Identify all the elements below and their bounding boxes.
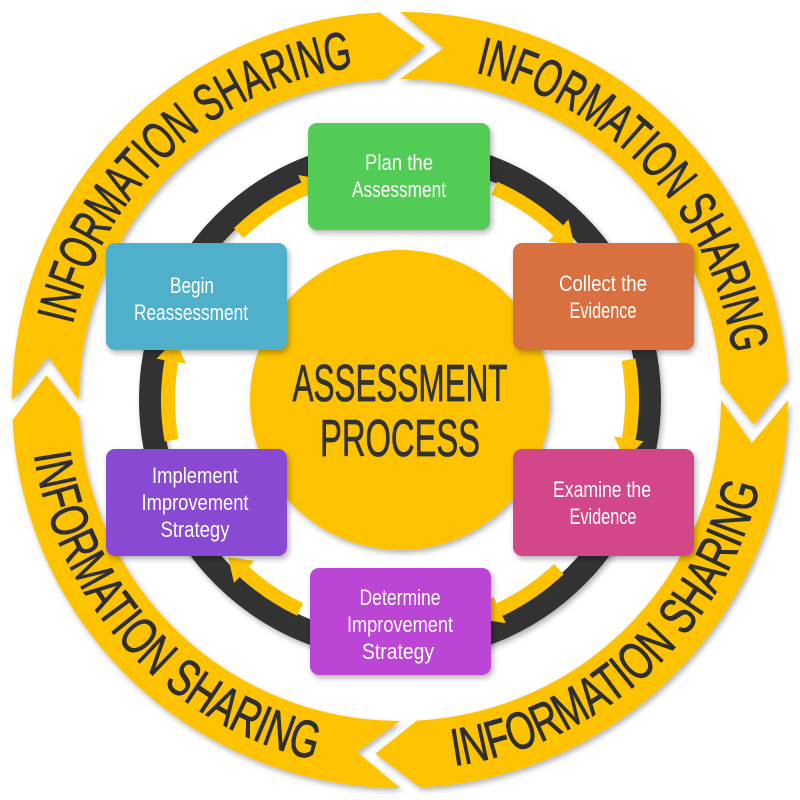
box: implement improvement strategy: Implement <box>152 463 238 488</box>
box: determine improvement strategy: Determine <box>360 585 440 610</box>
arrow: plan to collect <box>494 188 558 230</box>
arrow: determine to implement <box>244 572 300 609</box>
outer ring segment: bottom-left information sharing <box>12 375 402 794</box>
box: determine improvement strategy: Improvement <box>347 612 453 637</box>
box: examine the evidence: Examine the <box>553 477 651 502</box>
arrow: implement to begin <box>168 361 172 440</box>
outer ring segment: bottom-right information sharing: INFORMATION SHARING <box>452 481 758 766</box>
arrow: begin to plan <box>239 189 304 233</box>
box: plan the assessment: Assessment <box>352 177 446 202</box>
box: implement improvement strategy: Strategy <box>160 517 230 542</box>
box: begin reassessment: Reassessment <box>134 300 248 325</box>
dark cycle ring <box>151 151 649 649</box>
cycle arrows <box>168 188 632 610</box>
box: examine the evidence: Evidence <box>570 504 636 529</box>
box: implement improvement strategy <box>106 449 287 556</box>
box: determine improvement strategy: Strategy <box>362 639 434 664</box>
arrow: examine to determine <box>500 569 559 610</box>
center circle: PROCESS <box>320 410 480 468</box>
arrow: collect to examine <box>628 360 632 439</box>
box: examine the evidence <box>513 449 694 556</box>
outer ring segment: top-left information sharing: INFORMATION SHARING <box>37 32 350 322</box>
box: begin reassessment <box>106 243 287 350</box>
outer ring segment: top-right information sharing <box>400 12 792 429</box>
center circle <box>250 250 550 550</box>
outer ring segment: top-right information sharing: INFORMATION SHARING <box>478 37 768 350</box>
box: collect the evidence: Evidence <box>570 298 636 323</box>
outer ring segment: bottom-left information sharing: INFORMATION SHARING <box>34 452 319 758</box>
box: determine improvement strategy <box>310 568 491 675</box>
box: implement improvement strategy: Improvement <box>142 490 248 515</box>
box: begin reassessment: Begin <box>170 273 214 298</box>
center circle: ASSESSMENT <box>292 355 508 413</box>
box: plan the assessment <box>308 123 490 230</box>
box: plan the assessment: Plan the <box>365 150 433 175</box>
outer ring segment: bottom-right information sharing <box>375 400 793 794</box>
box: collect the evidence: Collect the <box>559 271 647 296</box>
outer ring segment: top-left information sharing <box>11 12 428 403</box>
box: collect the evidence <box>513 243 694 350</box>
